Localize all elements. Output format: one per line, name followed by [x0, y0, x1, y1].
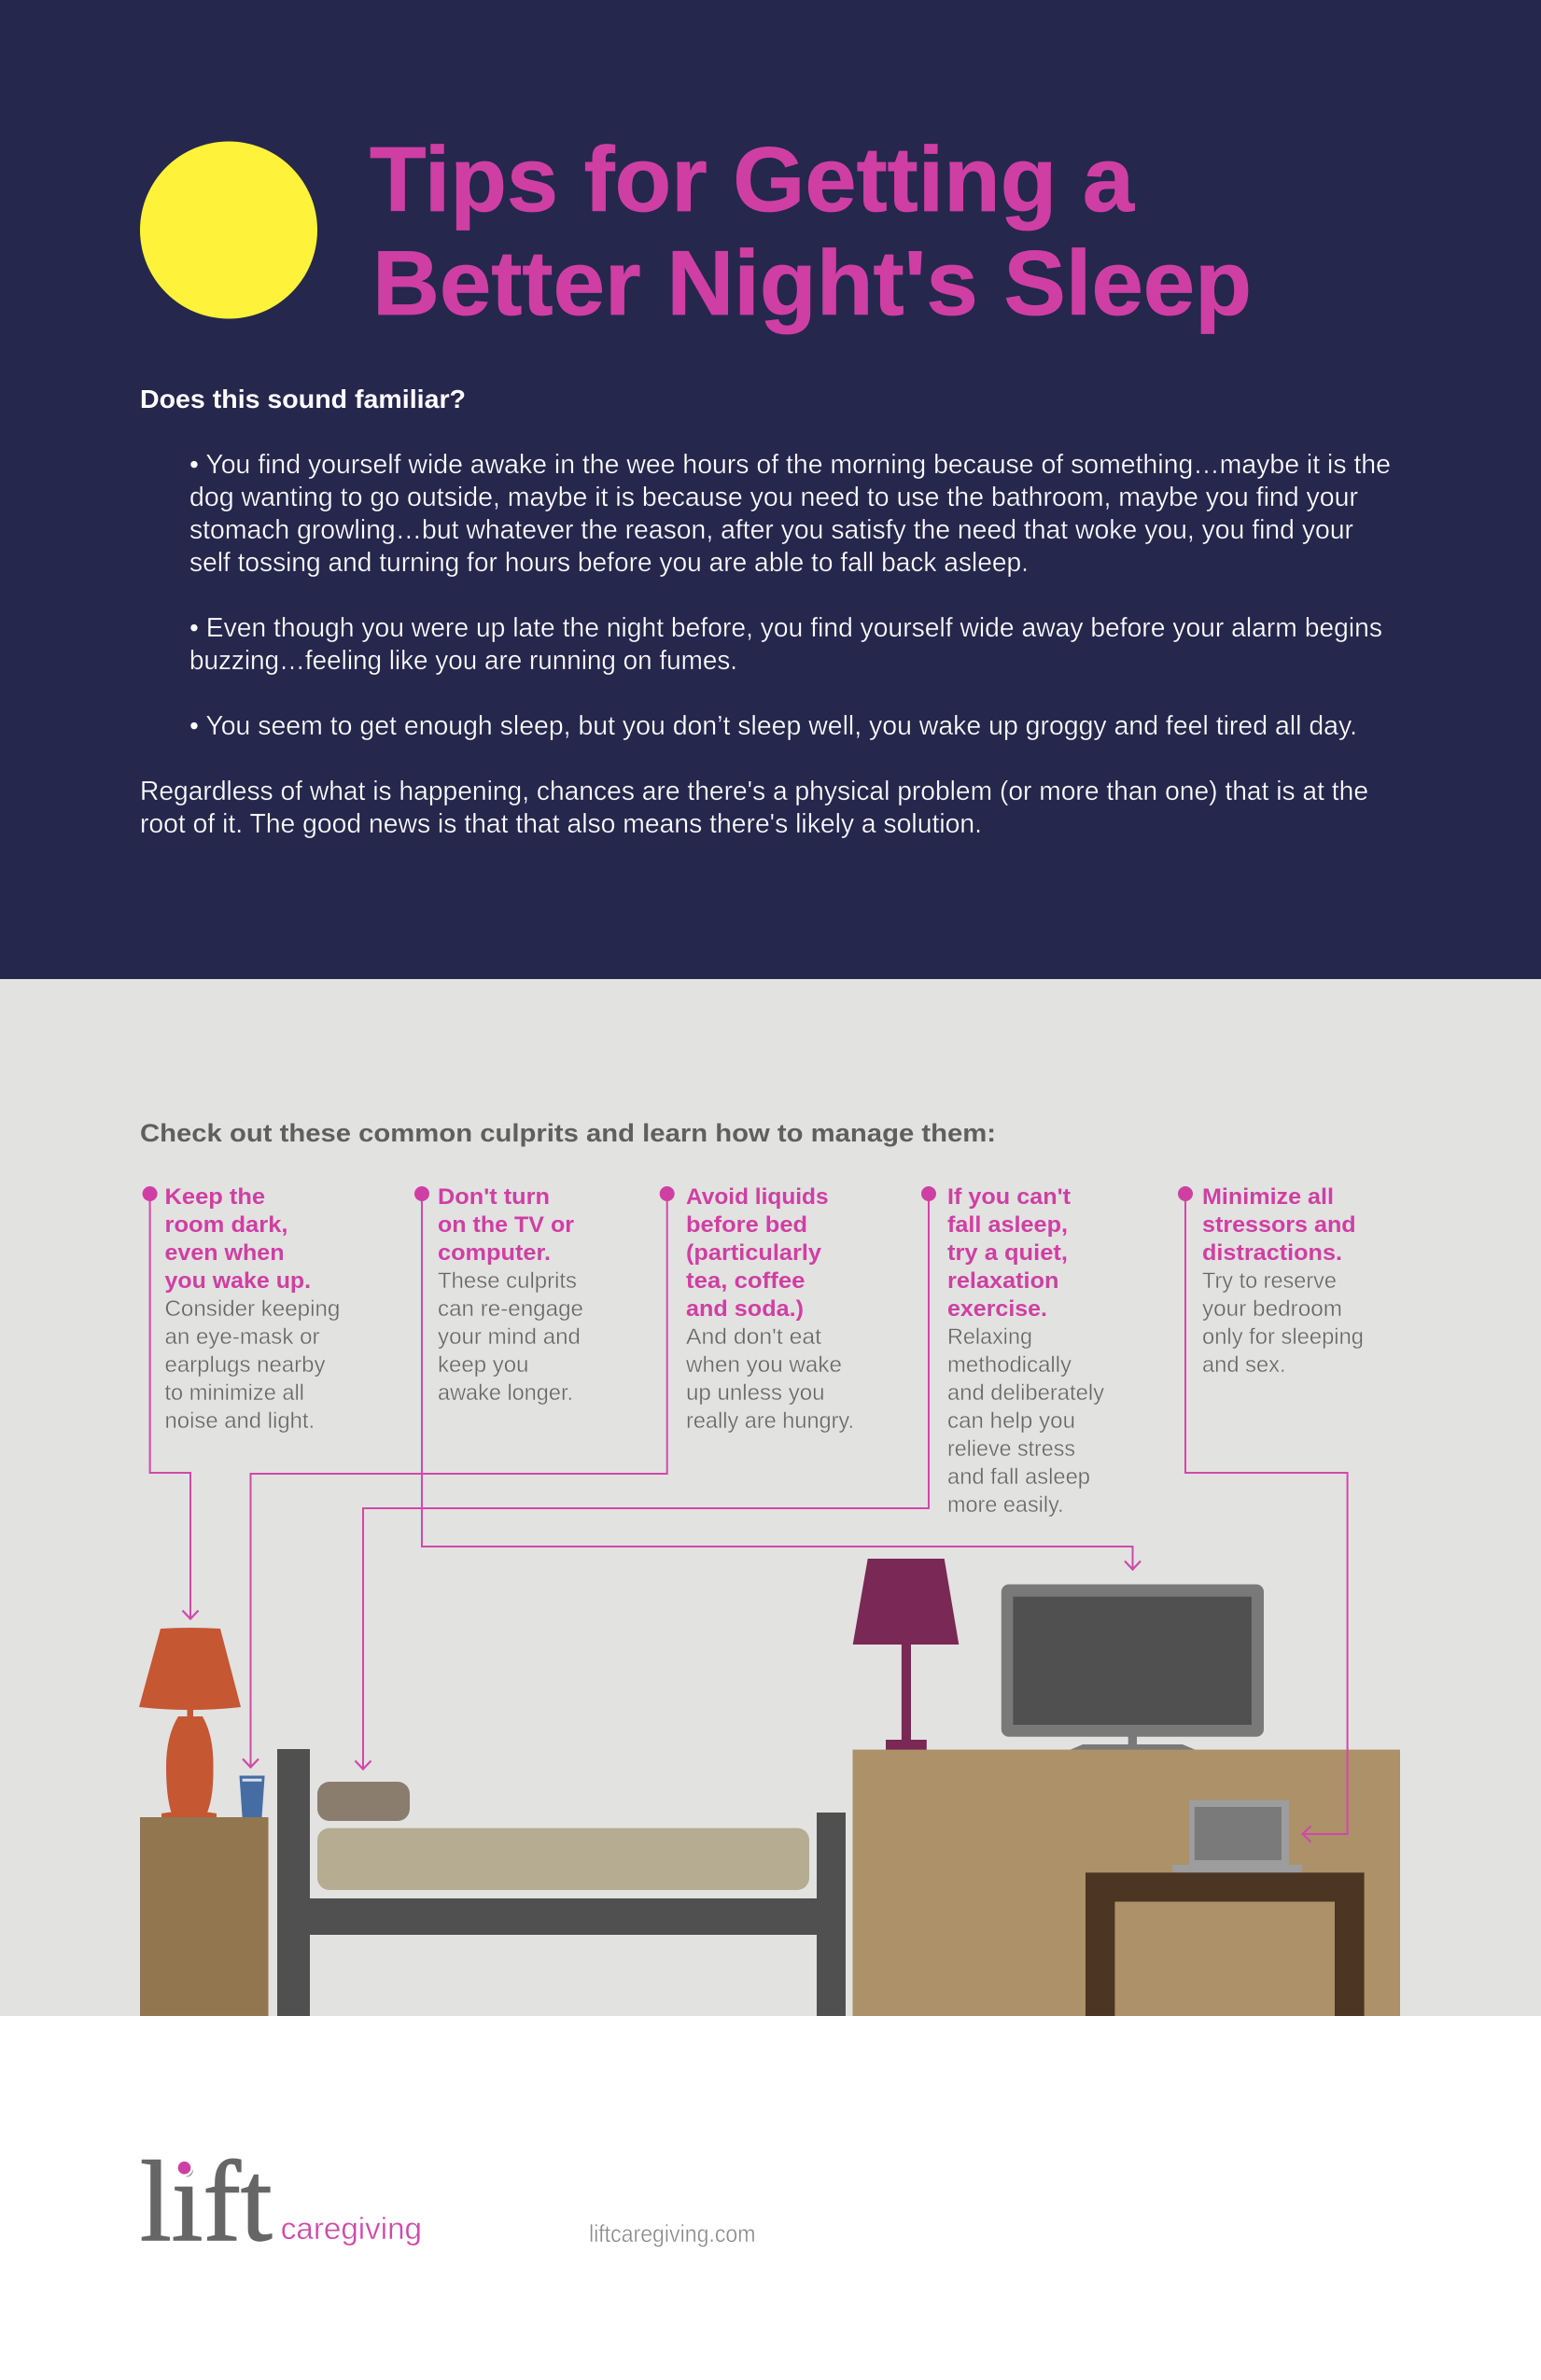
tip 4: quiet relaxation exercise: try a quiet, — [947, 1240, 1068, 1266]
tip 4: quiet relaxation exercise: methodically — [947, 1352, 1072, 1378]
tip 1: keep the room dark: even when — [164, 1240, 284, 1266]
tip 1: keep the room dark: noise and light. — [164, 1408, 315, 1434]
tip 4: quiet relaxation exercise: relaxation — [947, 1268, 1058, 1294]
tip 4: quiet relaxation exercise: and deliberately — [947, 1380, 1105, 1406]
connector: tip 4 to bed — [355, 1186, 936, 1770]
title: Tips for Getting a — [370, 128, 1136, 231]
tip 2: don't turn on the TV: These culprits — [438, 1268, 577, 1294]
tip 3: avoid liquids before bed: before bed — [686, 1212, 807, 1238]
tip 5: minimize stressors: stressors and — [1202, 1212, 1356, 1238]
pillow — [317, 1782, 410, 1821]
tip 1: keep the room dark: earplugs nearby — [164, 1352, 326, 1378]
tip 2: don't turn on the TV: can re-engage — [438, 1296, 583, 1322]
illustration: purple lamp — [853, 1559, 959, 1750]
tip 4: quiet relaxation exercise: Relaxing — [947, 1324, 1032, 1350]
tip 4: quiet relaxation exercise: If you can't — [947, 1184, 1071, 1210]
tip 4: quiet relaxation exercise: more easily. — [947, 1492, 1064, 1518]
illustration: laptop — [1172, 1800, 1302, 1872]
section heading: Check out these common culprits and learn how to manage them: — [140, 1119, 996, 1147]
tip 3: avoid liquids before bed: tea, coffee — [686, 1268, 805, 1294]
tip 4: quiet relaxation exercise: can help you — [947, 1408, 1075, 1434]
closing paragraph: root of it. The good news is that that also means there's likely a solution. — [140, 809, 982, 839]
tip 1: keep the room dark: room dark, — [164, 1212, 287, 1238]
tip 3: avoid liquids before bed: and soda.) — [686, 1296, 804, 1322]
logo: lift caregiving: lift — [140, 2137, 273, 2265]
tip 2: don't turn on the TV: awake longer. — [438, 1380, 573, 1406]
bullet 1 text: dog wanting to go outside, maybe it is because you need to use the bathroom, maybe you find your — [189, 483, 1359, 512]
illustration: blue glass — [239, 1775, 265, 1817]
connector: tip 3 to glass — [243, 1186, 675, 1768]
tip 1: keep the room dark: an eye-mask or — [164, 1324, 319, 1350]
tip 1: keep the room dark: to minimize all — [164, 1380, 304, 1406]
tip 1: keep the room dark — [164, 1184, 340, 1434]
bullet 1 text — [189, 450, 1391, 578]
closing paragraph — [140, 777, 1368, 839]
logo: lift caregiving: caregiving — [281, 2211, 422, 2246]
tip 4: quiet relaxation exercise: fall asleep, — [947, 1212, 1068, 1238]
logo: lift caregiving — [140, 2137, 422, 2265]
tip 5: minimize stressors: Try to reserve — [1202, 1268, 1337, 1294]
intro question heading: Does this sound familiar? — [140, 385, 466, 413]
connector: tip 1 to orange lamp — [143, 1186, 198, 1618]
tip 5: minimize stressors: your bedroom — [1202, 1296, 1342, 1322]
bullet 1 text: stomach growling…but whatever the reason, after you satisfy the need that woke you, you find your — [189, 515, 1354, 545]
tip 2: don't turn on the TV: Don't turn — [438, 1184, 550, 1210]
tip 5: minimize stressors: Minimize all — [1202, 1184, 1334, 1210]
illustration: dresser — [853, 1750, 1400, 2016]
tip 4: quiet relaxation exercise: and fall asleep — [947, 1464, 1090, 1490]
tip 4: quiet relaxation exercise: relieve stress — [947, 1436, 1075, 1462]
tip 2: don't turn on the TV: on the TV or — [438, 1212, 574, 1238]
tip 1: keep the room dark: Keep the — [164, 1184, 265, 1210]
bed frame — [277, 1749, 846, 2016]
tip 2: don't turn on the TV: computer. — [438, 1240, 551, 1266]
tip 2: don't turn on the TV — [438, 1184, 583, 1406]
tip 3: avoid liquids before bed: up unless you — [686, 1380, 825, 1406]
tip 5: minimize stressors — [1202, 1184, 1364, 1378]
tip 1: keep the room dark: Consider keeping — [164, 1296, 340, 1322]
bullet 2 text — [189, 613, 1382, 676]
tip 3: avoid liquids before bed: And don't eat — [686, 1324, 821, 1350]
panel: intro header — [0, 0, 1541, 979]
tip 5: minimize stressors: only for sleeping — [1202, 1324, 1364, 1350]
tip 4: quiet relaxation exercise: exercise. — [947, 1296, 1047, 1322]
illustration: television — [1002, 1585, 1264, 1750]
tip 3: avoid liquids before bed: really are hungry. — [686, 1408, 854, 1434]
bullet 1 text: • You find yourself wide awake in the wee hours of the morning because of something…maybe it is the — [189, 450, 1391, 480]
illustration: desk — [1086, 1872, 1365, 2016]
tip 1: keep the room dark: you wake up. — [164, 1268, 311, 1294]
title: Better Night's Sleep — [372, 231, 1252, 334]
connector: tip 5 to laptop — [1178, 1186, 1348, 1842]
connector: tip 2 to television — [414, 1186, 1141, 1570]
tip 5: minimize stressors: and sex. — [1202, 1352, 1286, 1378]
panel: culprits and bedroom illustration — [0, 979, 1541, 2016]
tip 3: avoid liquids before bed — [685, 1184, 854, 1434]
tip 2: don't turn on the TV: your mind and — [438, 1324, 581, 1350]
website address: liftcaregiving.com — [589, 2219, 756, 2247]
illustration: nightstand — [140, 1817, 269, 2016]
closing paragraph: Regardless of what is happening, chances are there's a physical problem (or more than one) that is at the — [140, 777, 1368, 806]
title — [370, 128, 1252, 334]
bullet 1 text: self tossing and turning for hours before you are able to fall back asleep. — [189, 548, 1029, 578]
tip 3: avoid liquids before bed: (particularly — [686, 1240, 821, 1266]
tip 5: minimize stressors: distractions. — [1202, 1240, 1342, 1266]
tip 2: don't turn on the TV: keep you — [438, 1352, 528, 1378]
tip 3: avoid liquids before bed: Avoid liquids — [686, 1184, 829, 1210]
tip 4: quiet relaxation exercise — [947, 1184, 1105, 1518]
illustration: orange lamp — [139, 1628, 241, 1817]
bullet 2 text: buzzing…feeling like you are running on fumes. — [189, 646, 737, 676]
illustration: bed — [277, 1749, 846, 2016]
icon: yellow moon — [140, 142, 317, 319]
bullet 3 text: • You seem to get enough sleep, but you don’t sleep well, you wake up groggy and feel tired all day. — [189, 711, 1357, 741]
tip 3: avoid liquids before bed: when you wake — [685, 1352, 842, 1378]
mattress — [317, 1828, 809, 1890]
bullet 2 text: • Even though you were up late the night before, you find yourself wide away before your alarm begins — [189, 613, 1382, 643]
